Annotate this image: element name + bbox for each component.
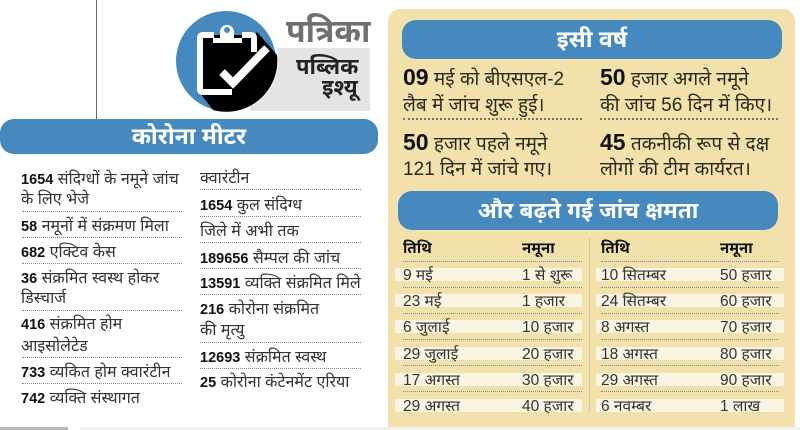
- row sample: 80 हजार: [720, 346, 772, 363]
- row sample: 50 हजार: [720, 267, 772, 284]
- row date: 17 अगस्त: [403, 372, 460, 389]
- row sample: 90 हजार: [720, 372, 772, 389]
- right list item: 12693 संक्रमित स्वस्थ: [200, 349, 326, 366]
- heading: this year: [402, 20, 782, 59]
- heading: corona meter: [0, 119, 378, 154]
- heading: growing capacity: [398, 191, 778, 230]
- row date: 24 सितम्बर: [601, 293, 666, 310]
- left list item continuation: के लिए भेजे: [21, 191, 89, 208]
- right list item: जिले में अभी तक: [200, 223, 299, 240]
- panel: corona meter list: [21, 168, 361, 407]
- column heading: date: तिथि: [601, 240, 630, 257]
- column heading: sample: नमूना: [522, 240, 555, 257]
- label line two: इश्यू: [322, 75, 358, 100]
- left list item: 742 व्यक्ति संस्थागत: [21, 390, 140, 407]
- row date: 23 मई: [403, 293, 441, 310]
- right list item continuation: की मृत्यु: [200, 322, 244, 339]
- brand name: पत्रिका: [286, 13, 370, 49]
- heading: corona meter: कोरोना मीटर: [132, 123, 246, 149]
- row date: 29 जुलाई: [403, 346, 458, 363]
- fact: next samples line two: की जांच 56 दिन में किए।: [600, 95, 772, 116]
- fact: team line two: लोगों की टीम कार्यरत।: [600, 159, 751, 180]
- left list item: 58 नमूनों में संक्रमण मिला: [21, 218, 169, 235]
- column heading: sample: नमूना: [720, 240, 753, 257]
- fact: team: 45 तकनीकी रूप से दक्ष: [600, 129, 769, 155]
- right list item: क्वारंटीन: [200, 170, 249, 187]
- left list item: 682 एक्टिव केस: [21, 244, 116, 261]
- fact: next samples: 50 हजार अगले नमूने: [600, 64, 749, 90]
- row sample: 70 हजार: [720, 319, 772, 336]
- right list item: 13591 व्यक्ति संक्रमित मिले: [200, 275, 361, 292]
- fact: first samples line two: 121 दिन में जांचे गए।: [403, 159, 552, 180]
- left list item: 36 संक्रमित स्वस्थ होकर: [21, 270, 159, 287]
- table: testing capacity left: [395, 240, 582, 415]
- heading: this year: इसी वर्ष: [557, 26, 627, 52]
- row sample: 1 हजार: [522, 293, 565, 310]
- panel: public issue label: [250, 48, 370, 111]
- right list item: 25 कोरोना कंटेनमेंट एरिया: [200, 374, 349, 391]
- left list item: 733 व्यकित होम क्वारंटीन: [21, 364, 170, 381]
- column heading: date: तिथि: [403, 240, 432, 257]
- fact: lab start line two: लैब में जांच शुरू हुई।: [403, 95, 545, 116]
- row date: 8 अगस्त: [601, 319, 649, 336]
- row date: 9 मई: [403, 267, 433, 284]
- row date: 10 सितम्बर: [601, 267, 666, 284]
- row date: 18 अगस्त: [601, 346, 658, 363]
- row sample: 20 हजार: [522, 346, 574, 363]
- row date: 6 जुलाई: [403, 319, 450, 336]
- table: testing capacity right: [596, 240, 784, 415]
- fact: first samples: 50 हजार पहले नमूने: [403, 129, 548, 155]
- fact: lab start: 09 मई को बीएसएल-2: [403, 64, 564, 90]
- right list item: 1654 कुल संदिग्ध: [200, 197, 302, 214]
- row date: 29 अगस्त: [403, 398, 460, 415]
- right list item: 189656 सैम्पल की जांच: [200, 250, 340, 267]
- row sample: 10 हजार: [522, 319, 574, 336]
- row sample: 1 से शुरू: [522, 267, 572, 284]
- icon: clipboard with check mark: [176, 11, 278, 112]
- left list item: 1654 संदिग्धों के नमूने जांच: [21, 171, 179, 188]
- left list item continuation: आइसोलेटेड: [21, 338, 88, 355]
- row sample: 1 लाख: [720, 398, 760, 415]
- right list item: 216 कोरोना संक्रमित: [200, 301, 319, 318]
- left list item: 416 संक्रमित होम: [21, 316, 122, 333]
- left list item continuation: डिस्चार्ज: [21, 290, 66, 307]
- row sample: 40 हजार: [522, 398, 574, 415]
- row sample: 30 हजार: [522, 372, 574, 389]
- panel: this year and testing capacity: [388, 9, 795, 427]
- row sample: 60 हजार: [720, 293, 772, 310]
- row date: 29 अगस्त: [601, 372, 658, 389]
- row date: 6 नवम्बर: [601, 398, 651, 415]
- heading: growing capacity: और बढ़ते गई जांच क्षमता: [478, 198, 698, 223]
- label line one: पब्लिक: [296, 54, 358, 79]
